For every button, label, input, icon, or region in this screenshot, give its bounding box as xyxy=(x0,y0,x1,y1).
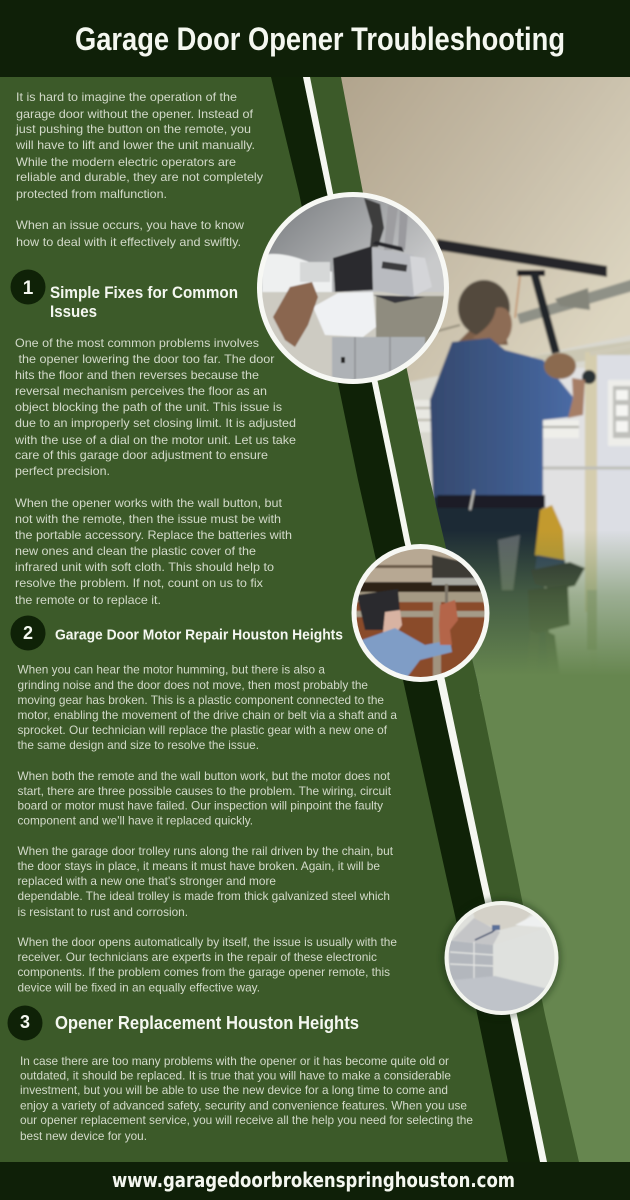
section 2 text: the same design and size to resolve the issue. xyxy=(18,738,259,752)
section 3 text: our opener replacement service, you will receive all the help you need for selecting the xyxy=(20,1113,473,1127)
circle photo: empty garage interior xyxy=(442,898,562,1018)
number badge 1 xyxy=(10,270,46,304)
section 1 text: the remote or to replace it. xyxy=(15,593,161,607)
intro text: will have to lift and lower the unit manually. xyxy=(15,138,255,152)
section 3 text xyxy=(20,1054,473,1143)
section 2 text xyxy=(18,662,397,994)
number badge 2 xyxy=(10,616,46,650)
section 3 text: In case there are too many problems with the opener or it has become quite old or xyxy=(20,1054,449,1068)
section 1 text: reversal mechanism perceives the floor as an xyxy=(15,384,267,398)
heading text 1: Simple Fixes for Common xyxy=(50,283,238,302)
intro text: reliable and durable, they are not completely xyxy=(16,170,263,184)
header bar xyxy=(0,0,630,77)
section 1 text: new ones and clean the plastic cover of the xyxy=(15,544,256,558)
section 2 text: sprocket. Our technician will replace the plastic gear with a new one of xyxy=(18,723,388,737)
intro text xyxy=(15,90,263,249)
intro text: It is hard to imagine the operation of the xyxy=(16,90,237,104)
section 1 heading xyxy=(10,270,238,321)
section 2 text: motor, enabling the movement of the drive chain or belt via a shaft and a xyxy=(18,708,397,722)
intro text: When an issue occurs, you have to know xyxy=(16,218,244,232)
section 1 text: One of the most common problems involves xyxy=(15,336,259,350)
intro text: just pushing the button on the remote, you xyxy=(15,122,251,136)
section 2 text: When you can hear the motor humming, but there is also a xyxy=(18,662,325,676)
section 2 text: When the garage door trolley runs along the rail driven by the chain, but xyxy=(18,844,394,858)
circle photo: garage door opener motor xyxy=(255,190,450,390)
section 3 heading xyxy=(8,1006,359,1040)
number badge 3: 3 xyxy=(20,1012,30,1032)
section 3 text: outdated, it should be replaced. It is true that you will have to make a considerable xyxy=(20,1068,451,1082)
section 1 text: the opener lowering the door too far. The door xyxy=(18,352,274,366)
number badge 1: 1 xyxy=(23,278,34,299)
section 1 text: perfect precision. xyxy=(15,464,110,478)
heading text 1 xyxy=(50,283,238,321)
section 1 text xyxy=(14,336,296,607)
section 2 text: dependable. The ideal trolley is made from thick galvanized steel which xyxy=(18,889,390,903)
number badge 3 xyxy=(8,1006,42,1040)
section 2 text: board or motor must have failed. Our inspection will pinpoint the faulty xyxy=(18,798,383,812)
diagonal white stripe xyxy=(303,77,547,1162)
section 3 text: enjoy a variety of advanced safety, security and convenience features. When you use xyxy=(20,1098,467,1112)
intro text: protected from malfunction. xyxy=(16,187,167,201)
section 1 text: the portable accessory. Replace the batteries with xyxy=(15,528,292,542)
photo: technician working on garage door rail xyxy=(320,60,630,1170)
section 1 text: object blocking the path of the unit. This issue is xyxy=(15,400,282,414)
intro text: While the modern electric operators are xyxy=(16,155,236,169)
footer bar xyxy=(0,1162,630,1200)
section 3 text: best new device for you. xyxy=(20,1129,147,1143)
section 1 text: infrared unit with soft cloth. This should help to xyxy=(15,560,274,574)
section 2 text: receiver. Our technicians are experts in the repair of these electronic xyxy=(18,950,377,964)
section 1 text: care of this garage door adjustment to ensure xyxy=(15,448,268,462)
heading text 3: Opener Replacement Houston Heights xyxy=(55,1013,359,1033)
heading text 1: Issues xyxy=(50,302,97,321)
section 1 text: due to an improperly set closing limit. It is adjusted xyxy=(15,416,296,430)
section 2 text: device will be fixed in an equally effective way. xyxy=(18,980,260,994)
footer website address: www.garagedoorbrokenspringhouston.com xyxy=(112,1168,515,1192)
section 2 text: moving gear has broken. This is a plastic component connected to the xyxy=(18,693,384,707)
section 2 text: components. If the problem comes from the garage opener remote, this xyxy=(18,965,390,979)
section 2 text: replaced with a new one that's stronger and more xyxy=(18,874,276,888)
section 2 text: When both the remote and the wall button work, but the motor does not xyxy=(18,769,391,783)
section 2 text: start, there are three possible causes to the problem. The wiring, circuit xyxy=(18,784,392,798)
section 2 text: When the door opens automatically by itself, the issue is usually with the xyxy=(18,935,397,949)
section 3 text: investment, but you will be able to use the new device for a long time to come and xyxy=(20,1083,448,1097)
section 1 text: resolve the problem. If not, count on us to fix xyxy=(15,576,263,590)
section 1 text: not with the remote, then the issue must be with xyxy=(15,512,281,526)
section 2 text: the door stays in place, it means it must have broken. Again, it will be xyxy=(18,859,380,873)
section 2 text: grinding noise and the door does not move, then most probably the xyxy=(18,678,368,692)
section 1 text: hits the floor and then reverses because the xyxy=(15,368,259,382)
intro text: garage door without the opener. Instead of xyxy=(16,107,254,121)
number badge 2: 2 xyxy=(23,623,33,643)
heading text 2: Garage Door Motor Repair Houston Heights xyxy=(55,626,343,644)
circle photo: technician reaching up to opener xyxy=(350,544,490,682)
section 1 text: When the opener works with the wall button, but xyxy=(15,496,283,510)
section 2 text: component and we'll have it replaced quickly. xyxy=(18,814,253,828)
section 2 heading xyxy=(10,616,343,650)
diagonal dark band xyxy=(271,77,541,1162)
intro text: how to deal with it effectively and swiftly. xyxy=(16,235,241,249)
section 1 text: with the use of a dial on the motor unit. Let us take xyxy=(14,433,296,447)
section 2 text: is resistant to rust and corrosion. xyxy=(18,905,188,919)
